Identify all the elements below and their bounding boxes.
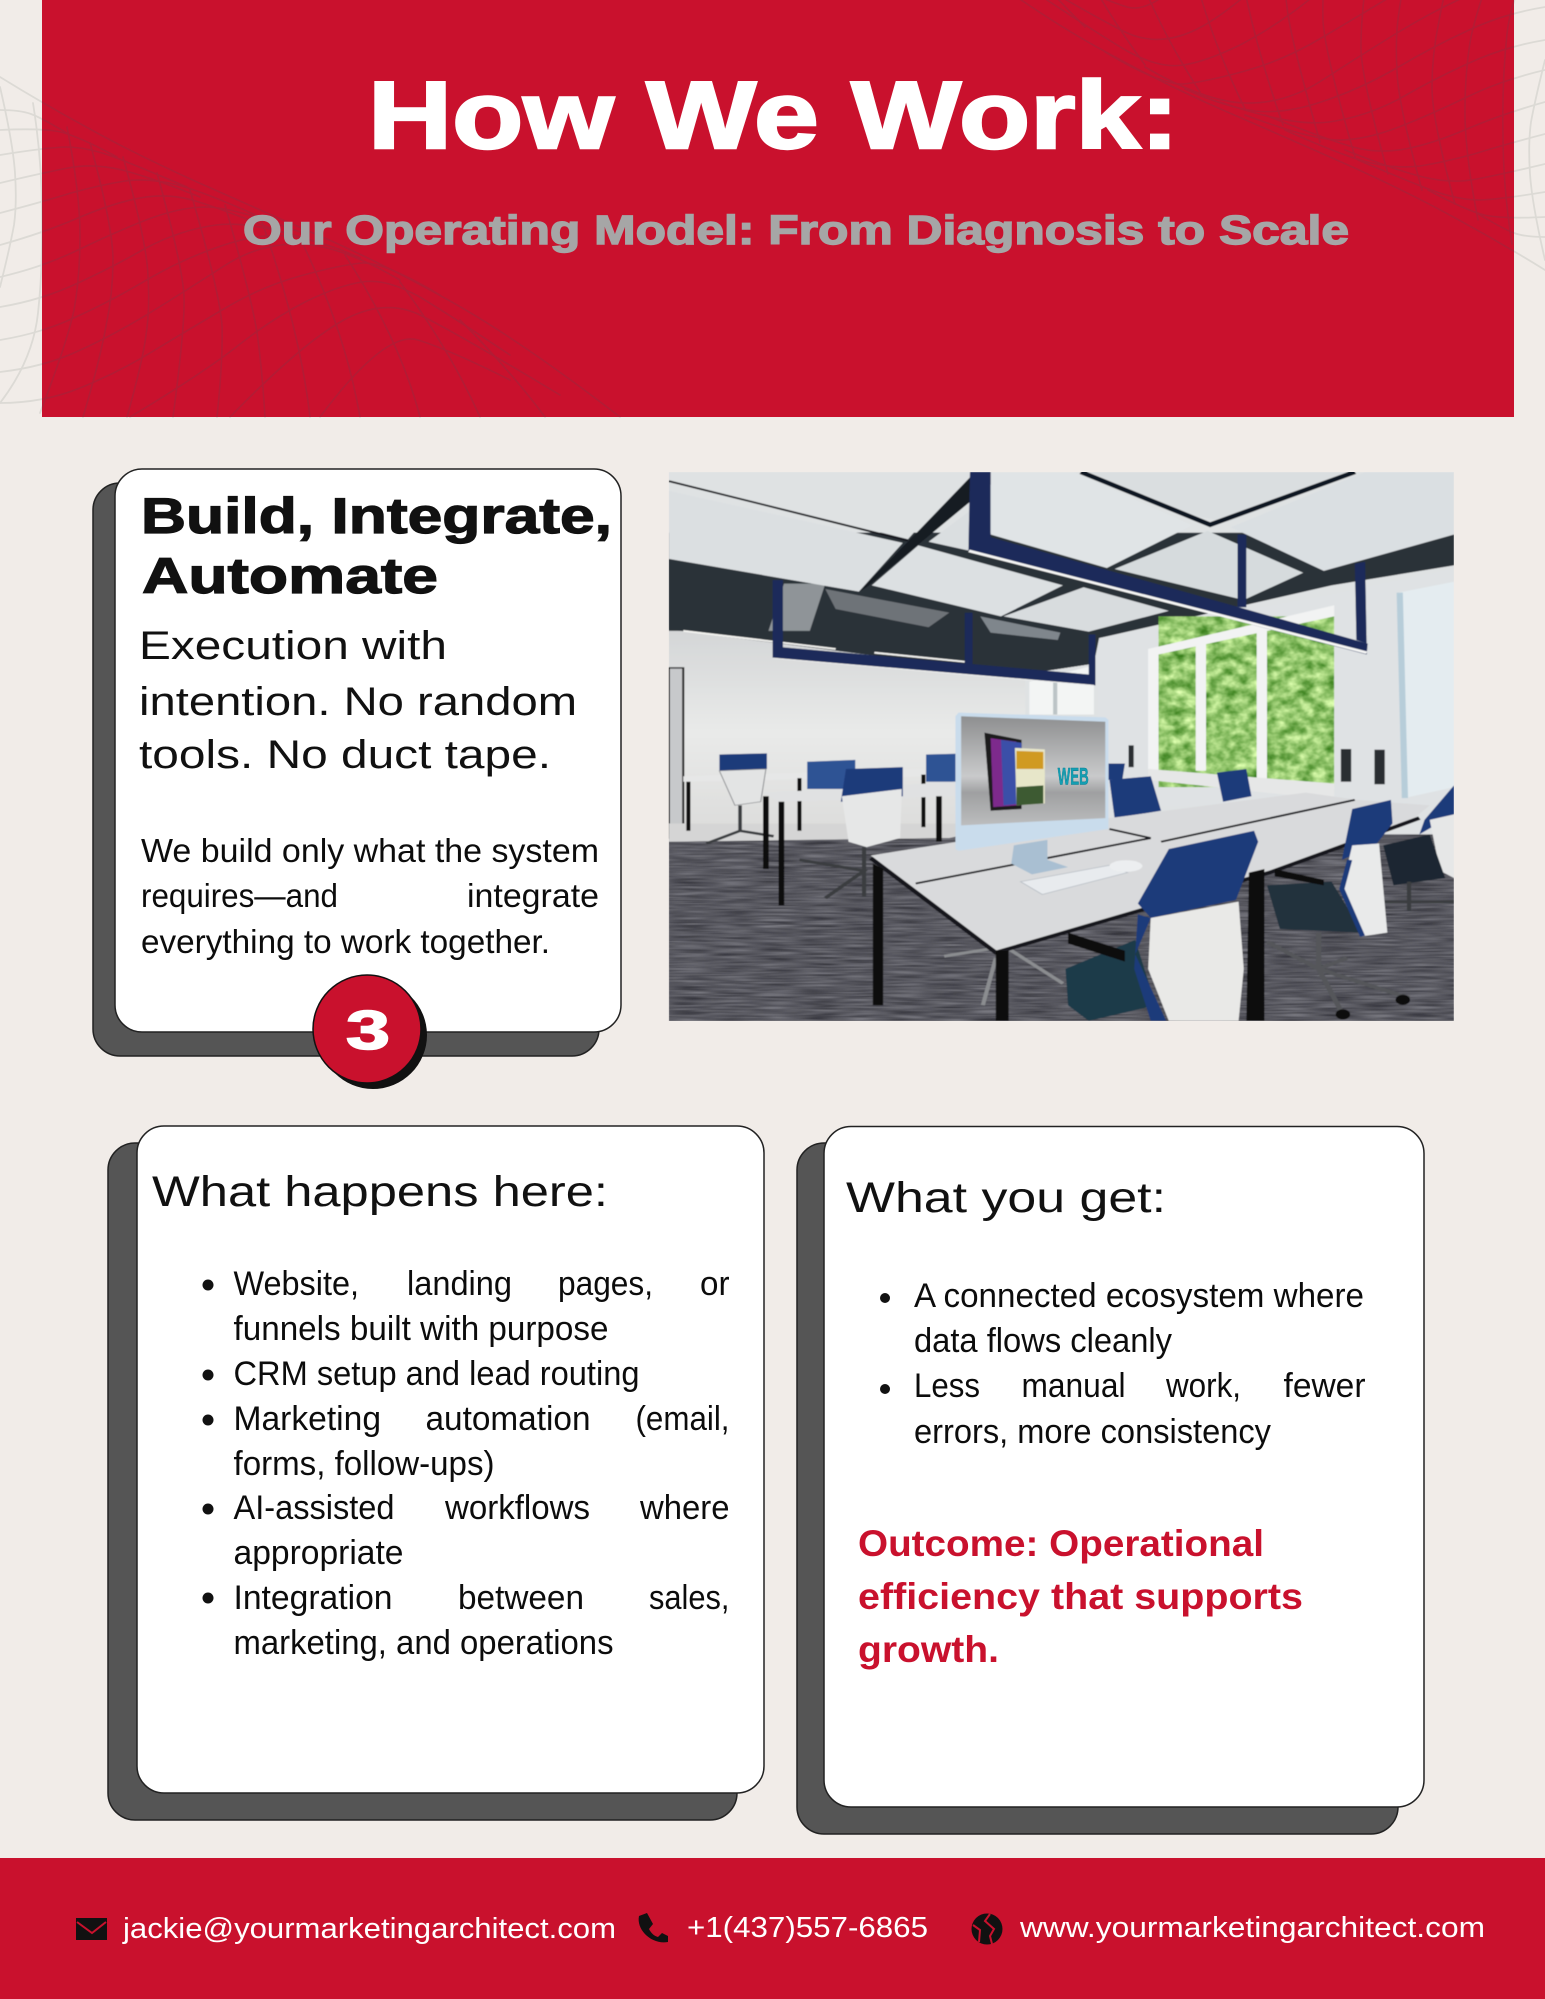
panel body text: everything to work together.	[141, 923, 550, 960]
header banner	[0, 0, 1545, 417]
list: activities: funnels built with purpose	[234, 1310, 608, 1348]
email address: jackie@yourmarketingarchitect.com	[122, 1913, 616, 1945]
list: activities: CRM setup and lead routing	[234, 1355, 640, 1393]
list: activities: automation	[426, 1400, 590, 1438]
panel heading: Build, Integrate,	[141, 488, 612, 544]
list: activities: Website,	[234, 1265, 359, 1303]
title: How We Work:	[368, 62, 1179, 169]
panel subheading	[139, 624, 577, 777]
step number badge	[313, 975, 427, 1089]
photo: office room with desktop monitor	[668, 472, 1454, 1021]
footer contact bar	[0, 1858, 1545, 1999]
outcome statement	[858, 1523, 1303, 1670]
list: activities: landing	[407, 1265, 512, 1303]
list: benefits: manual	[1022, 1367, 1126, 1405]
list: benefits	[880, 1277, 1366, 1451]
panel: what you get	[797, 1126, 1424, 1834]
subtitle: Our Operating Model: From Diagnosis to Scale	[243, 207, 1349, 253]
list: activities: (email,	[636, 1400, 730, 1438]
heading: what you get: What you get:	[846, 1174, 1166, 1222]
list: activities: pages,	[558, 1265, 653, 1303]
list: activities: AI-assisted	[234, 1489, 394, 1527]
icon: email	[76, 1918, 107, 1940]
icon: phone	[639, 1913, 668, 1942]
list: activities: Marketing	[234, 1400, 381, 1438]
list: benefits: work,	[1165, 1367, 1241, 1405]
list: benefits: Less	[914, 1367, 980, 1405]
panel heading: Automate	[142, 548, 438, 604]
outcome statement: Outcome: Operational	[858, 1523, 1264, 1564]
list: activities: workflows	[444, 1489, 590, 1527]
panel: build, integrate, automate	[93, 469, 621, 1089]
panel: what happens here	[108, 1126, 764, 1820]
panel body text	[141, 832, 599, 960]
list: activities: forms, follow-ups)	[234, 1445, 494, 1483]
website: www.yourmarketingarchitect.com	[1019, 1912, 1485, 1944]
list: benefits: fewer	[1284, 1367, 1366, 1405]
phone number: +1(437)557-6865	[687, 1912, 928, 1944]
panel subheading: intention. No random	[139, 680, 577, 724]
outcome statement: growth.	[858, 1629, 999, 1670]
step number badge: 3	[346, 999, 390, 1061]
panel heading	[141, 488, 612, 604]
panel body text: requires—and	[141, 877, 338, 914]
panel subheading: Execution with	[139, 624, 447, 668]
list: activities: where	[639, 1489, 730, 1527]
list: activities: Integration	[234, 1579, 392, 1617]
list: activities: sales,	[649, 1579, 730, 1617]
icon: globe	[972, 1914, 1002, 1944]
list: activities: appropriate	[234, 1534, 404, 1572]
panel body text: We build only what the system	[141, 832, 599, 869]
list: activities: or	[700, 1265, 730, 1303]
photo: office room with desktop monitor: WEB	[1058, 763, 1089, 790]
list: benefits: data flows cleanly	[914, 1322, 1172, 1360]
outcome statement: efficiency that supports	[858, 1576, 1303, 1617]
background mesh pattern	[0, 0, 1545, 417]
list: benefits: errors, more consistency	[914, 1413, 1271, 1451]
list: activities: marketing, and operations	[234, 1624, 614, 1662]
panel body text: integrate	[467, 877, 599, 914]
list: activities	[202, 1265, 730, 1662]
panel subheading: tools. No duct tape.	[139, 733, 551, 777]
list: activities: between	[458, 1579, 584, 1617]
heading: what happens here: What happens here:	[152, 1168, 608, 1216]
list: benefits: A connected ecosystem where	[914, 1277, 1364, 1315]
